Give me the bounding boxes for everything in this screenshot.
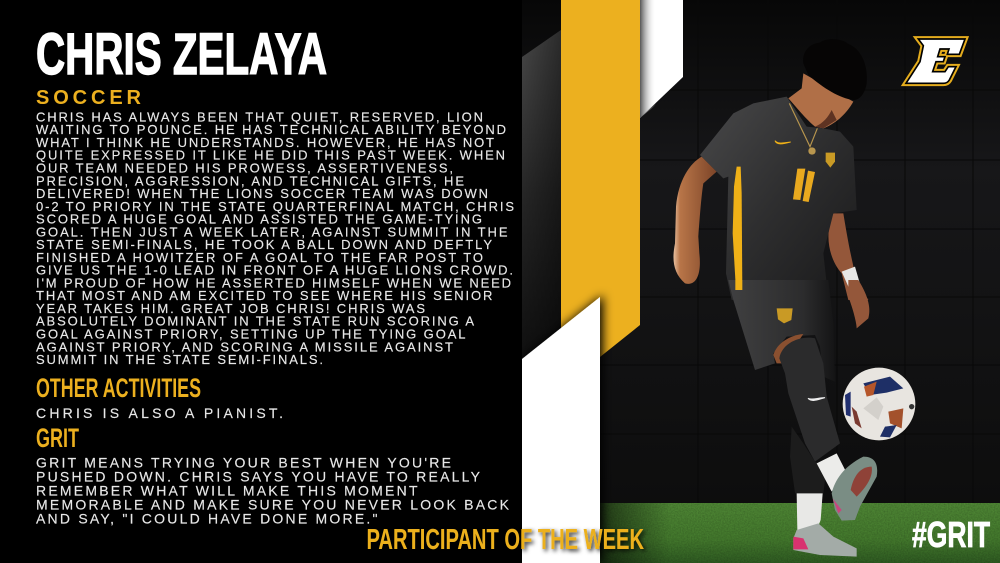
biography text block: PRECISION, AGGRESSION, AND TECHNICAL GIFTS, HE <box>36 173 464 188</box>
biography text block: 0-2 TO PRIORY IN THE STATE QUARTERFINAL MATCH, CHRIS <box>36 199 514 214</box>
raised cleat <box>832 457 877 521</box>
shorts crest <box>777 308 793 323</box>
jersey number 11 <box>793 169 815 202</box>
biography text block: STATE SEMI-FINALS, HE TOOK A BALL DOWN AND DEFTLY <box>36 237 492 252</box>
right arm <box>828 213 868 300</box>
grit text block: MEMORABLE AND MAKE SURE YOU NEVER LOOK BACK <box>36 497 510 513</box>
biography text block: ABSOLUTELY DOMINANT IN THE STATE RUN SCORING A <box>36 314 474 329</box>
biography text block: I'M PROUD OF HOW HE ASSERTED HIMSELF WHEN WE NEED <box>36 275 511 290</box>
biography text block: WHAT I THINK HE UNDERSTANDS. HOWEVER, HE HAS NOT <box>36 135 494 150</box>
wristband <box>842 267 859 287</box>
shorts <box>728 280 835 382</box>
other activities heading: OTHER ACTIVITIES <box>36 373 201 403</box>
crest <box>826 153 835 168</box>
neck and face <box>788 73 853 128</box>
left arm <box>673 157 717 284</box>
gold accent band <box>561 0 640 357</box>
front sock <box>817 453 846 492</box>
grey accent band <box>522 30 561 359</box>
right hand <box>848 280 869 328</box>
white lower accent band <box>522 297 600 563</box>
hair <box>803 39 867 100</box>
jersey stripe end <box>735 280 742 290</box>
planted cleat <box>793 523 857 557</box>
biography text block: AGAINST PRIORY, AND SCORING A MISSILE AGAINST <box>36 339 453 354</box>
thigh skin <box>773 334 803 363</box>
biography text block: GOAL AGAINST PRIORY, SETTING UP THE TYING GOAL <box>36 326 466 342</box>
grit text block: AND SAY, "I COULD HAVE DONE MORE." <box>36 511 378 527</box>
jersey side stripe <box>733 167 742 291</box>
title: athlete name: CHRIS ZELAYA <box>36 22 327 87</box>
face shadow <box>815 110 837 128</box>
sleeve swoosh <box>808 398 825 400</box>
grit text block: PUSHED DOWN. CHRIS SAYS YOU HAVE TO REALLY <box>36 469 481 485</box>
biography text block <box>36 109 514 367</box>
player photo: upper body <box>673 39 868 300</box>
biography text block: THAT MOST AND AM EXCITED TO SEE WHERE HIS SENIOR <box>36 288 492 303</box>
biography text block: OUR TEAM NEEDED HIS PROWESS, ASSERTIVENESS, <box>36 160 453 176</box>
photo background: studio wall and turf <box>522 0 1000 563</box>
jersey <box>700 97 857 300</box>
grit text block: GRIT MEANS TRYING YOUR BEST WHEN YOU'RE <box>36 455 451 471</box>
necklace <box>789 103 817 155</box>
biography text block: SUMMIT IN THE STATE SEMI-FINALS. <box>36 352 323 367</box>
player photo: lower body <box>728 280 915 557</box>
back leg <box>790 427 827 493</box>
biography text block: CHRIS HAS ALWAYS BEEN THAT QUIET, RESERVED, LION <box>36 109 483 124</box>
nike swoosh <box>775 141 791 144</box>
biography text block: WAITING TO POUNCE. HE HAS TECHNICAL ABILITY BEYOND <box>36 122 506 137</box>
logo: E mark <box>906 39 965 83</box>
biography text block: DELIVERED! WHEN THE LIONS SOCCER TEAM WAS DOWN <box>36 186 488 201</box>
white upper accent band <box>640 0 683 118</box>
grit text block <box>36 455 510 527</box>
grit heading: GRIT <box>36 423 79 453</box>
grit text block: REMEMBER WHAT WILL MAKE THIS MOMENT <box>36 483 418 499</box>
biography text block: QUITE EXPRESSED IT LIKE HE DID THIS PAST WEEK. WHEN <box>36 148 505 163</box>
back sock <box>797 493 823 530</box>
biography text block: FINISHED A HOWITZER OF A GOAL TO THE FAR POST TO <box>36 250 483 265</box>
soccer ball <box>843 368 915 440</box>
front leg sleeve <box>779 338 840 462</box>
sport heading: SOCCER <box>36 87 142 109</box>
other activities text: CHRIS IS ALSO A PIANIST. <box>36 405 283 421</box>
biography text block: GOAL. THEN JUST A WEEK LATER, AGAINST SUMMIT IN THE <box>36 224 508 239</box>
biography text block: GIVE US THE 1-0 LEAD IN FRONT OF A HUGE LIONS CROWD. <box>36 263 513 278</box>
biography text block: SCORED A HUGE GOAL AND ASSISTED THE GAME-TYING <box>36 212 482 227</box>
biography text block: YEAR TAKES HIM. GREAT JOB CHRIS! CHRIS WAS <box>36 301 425 316</box>
footer label: participant of the week: PARTICIPANT OF THE WEEK <box>366 524 644 556</box>
